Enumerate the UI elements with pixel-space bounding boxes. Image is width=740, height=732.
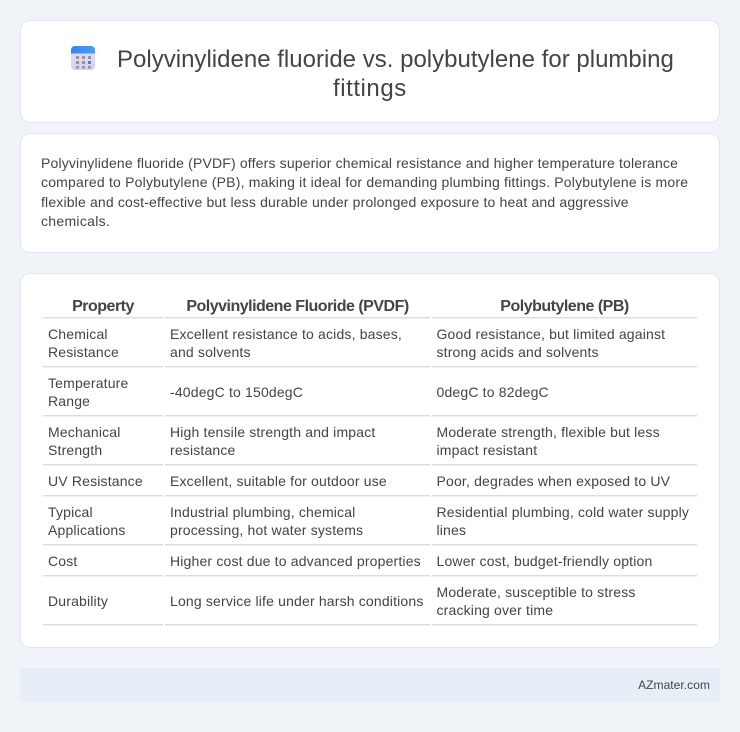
row: typical applications: Typical xyxy=(48,504,93,520)
row: chemical resistance: and solvents xyxy=(170,344,251,360)
row: chemical resistance: Good resistance, but limited against xyxy=(436,326,665,342)
row: typical applications: Applications xyxy=(48,522,126,538)
summary text xyxy=(41,155,688,229)
row: cost xyxy=(43,553,697,577)
header card xyxy=(20,20,720,123)
footer credit: AZmater.com xyxy=(638,678,710,692)
row: chemical resistance: Excellent resistance to acids, bases, xyxy=(170,326,402,342)
summary text: Polyvinylidene fluoride (PVDF) offers superior chemical resistance and higher temperature tolerance xyxy=(41,155,678,171)
row: mechanical strength: High tensile strength and impact xyxy=(170,424,375,440)
row: durability xyxy=(43,584,697,626)
summary card xyxy=(20,133,720,253)
title xyxy=(117,46,674,102)
table header: Property xyxy=(72,298,134,315)
icon: calendar grid xyxy=(71,46,95,70)
row: typical applications xyxy=(43,504,697,546)
footer bar xyxy=(20,668,720,702)
row: chemical resistance: Chemical xyxy=(48,326,108,342)
row: durability: cracking over time xyxy=(436,602,553,618)
row: mechanical strength: Moderate strength, flexible but less xyxy=(436,424,660,440)
row: temperature range: Temperature xyxy=(48,375,128,391)
row: durability: Long service life under harsh conditions xyxy=(170,593,424,609)
row: chemical resistance xyxy=(43,326,697,368)
row: typical applications: processing, hot water systems xyxy=(170,522,363,538)
table header: Polybutylene (PB) xyxy=(500,298,629,315)
row: temperature range: -40degC to 150degC xyxy=(170,384,303,400)
table card xyxy=(20,273,720,648)
row: mechanical strength: resistance xyxy=(170,442,236,458)
row: chemical resistance: strong acids and solvents xyxy=(436,344,599,360)
table header: Polyvinylidene Fluoride (PVDF) xyxy=(186,298,409,315)
row: temperature range: Range xyxy=(48,393,90,409)
row: UV resistance: Excellent, suitable for outdoor use xyxy=(170,473,387,489)
row: cost: Cost xyxy=(48,553,77,569)
title: Polyvinylidene fluoride vs. polybutylene for plumbing xyxy=(117,46,674,73)
row: UV resistance: UV Resistance xyxy=(48,473,143,489)
row: typical applications: lines xyxy=(436,522,466,538)
row: temperature range: 0degC to 82degC xyxy=(436,384,549,400)
row: UV resistance: Poor, degrades when exposed to UV xyxy=(436,473,670,489)
row: cost: Lower cost, budget-friendly option xyxy=(436,553,652,569)
title: fittings xyxy=(333,75,407,102)
summary text: chemicals. xyxy=(41,213,110,229)
row: mechanical strength: Strength xyxy=(48,442,102,458)
row: cost: Higher cost due to advanced properties xyxy=(170,553,421,569)
comparison table xyxy=(43,298,697,626)
row: mechanical strength: impact resistant xyxy=(436,442,537,458)
summary text: flexible and cost-effective but less durable under prolonged exposure to heat and aggressive xyxy=(41,194,629,210)
row: mechanical strength xyxy=(43,424,697,466)
row: mechanical strength: Mechanical xyxy=(48,424,121,440)
table header xyxy=(43,298,697,319)
row: durability: Moderate, susceptible to stress xyxy=(436,584,636,600)
summary text: compared to Polybutylene (PB), making it ideal for demanding plumbing fittings. Polybutylene is more xyxy=(41,174,688,190)
row: durability: Durability xyxy=(48,593,108,609)
row: typical applications: Industrial plumbing, chemical xyxy=(170,504,355,520)
row: typical applications: Residential plumbing, cold water supply xyxy=(436,504,689,520)
row: UV resistance xyxy=(43,473,697,497)
row: chemical resistance: Resistance xyxy=(48,344,119,360)
row: temperature range xyxy=(43,375,697,417)
